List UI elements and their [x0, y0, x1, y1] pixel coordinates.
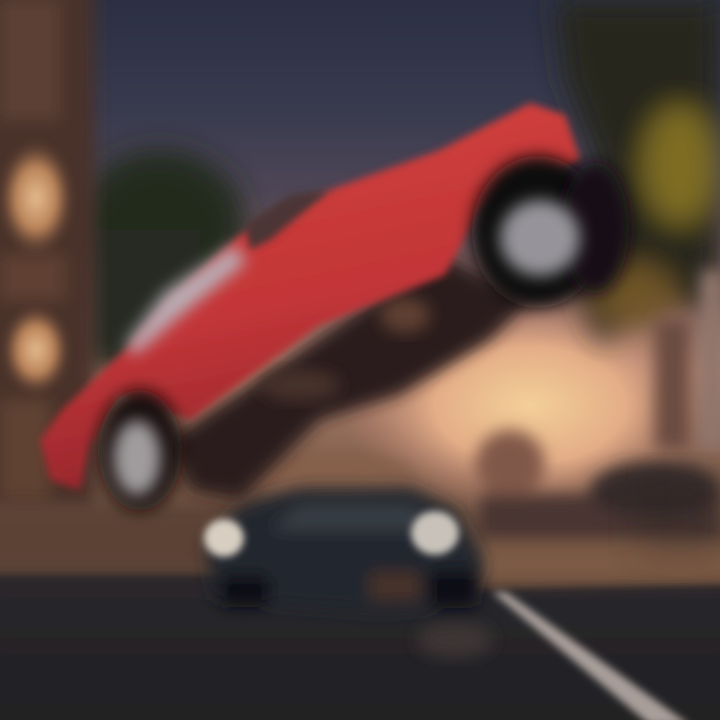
- red flying car: [40, 103, 629, 510]
- front wheel: [98, 390, 182, 510]
- ground verge: [0, 454, 720, 584]
- windows: [125, 245, 246, 355]
- undercarriage: [170, 255, 530, 500]
- left building with lit windows: [0, 0, 95, 510]
- road: [0, 575, 720, 720]
- atmospheric softening at right edge: [640, 480, 720, 550]
- sunset glow: [340, 290, 720, 520]
- right-hand trunks and distant buildings: [475, 270, 720, 540]
- dark tree behind the car: [75, 150, 245, 370]
- car body: [40, 103, 580, 490]
- rear wheel: [472, 156, 629, 308]
- headlights: [204, 519, 244, 557]
- right-hand palm foliage: [555, 0, 720, 345]
- black car on the road: [204, 488, 482, 612]
- road marking: [492, 592, 690, 720]
